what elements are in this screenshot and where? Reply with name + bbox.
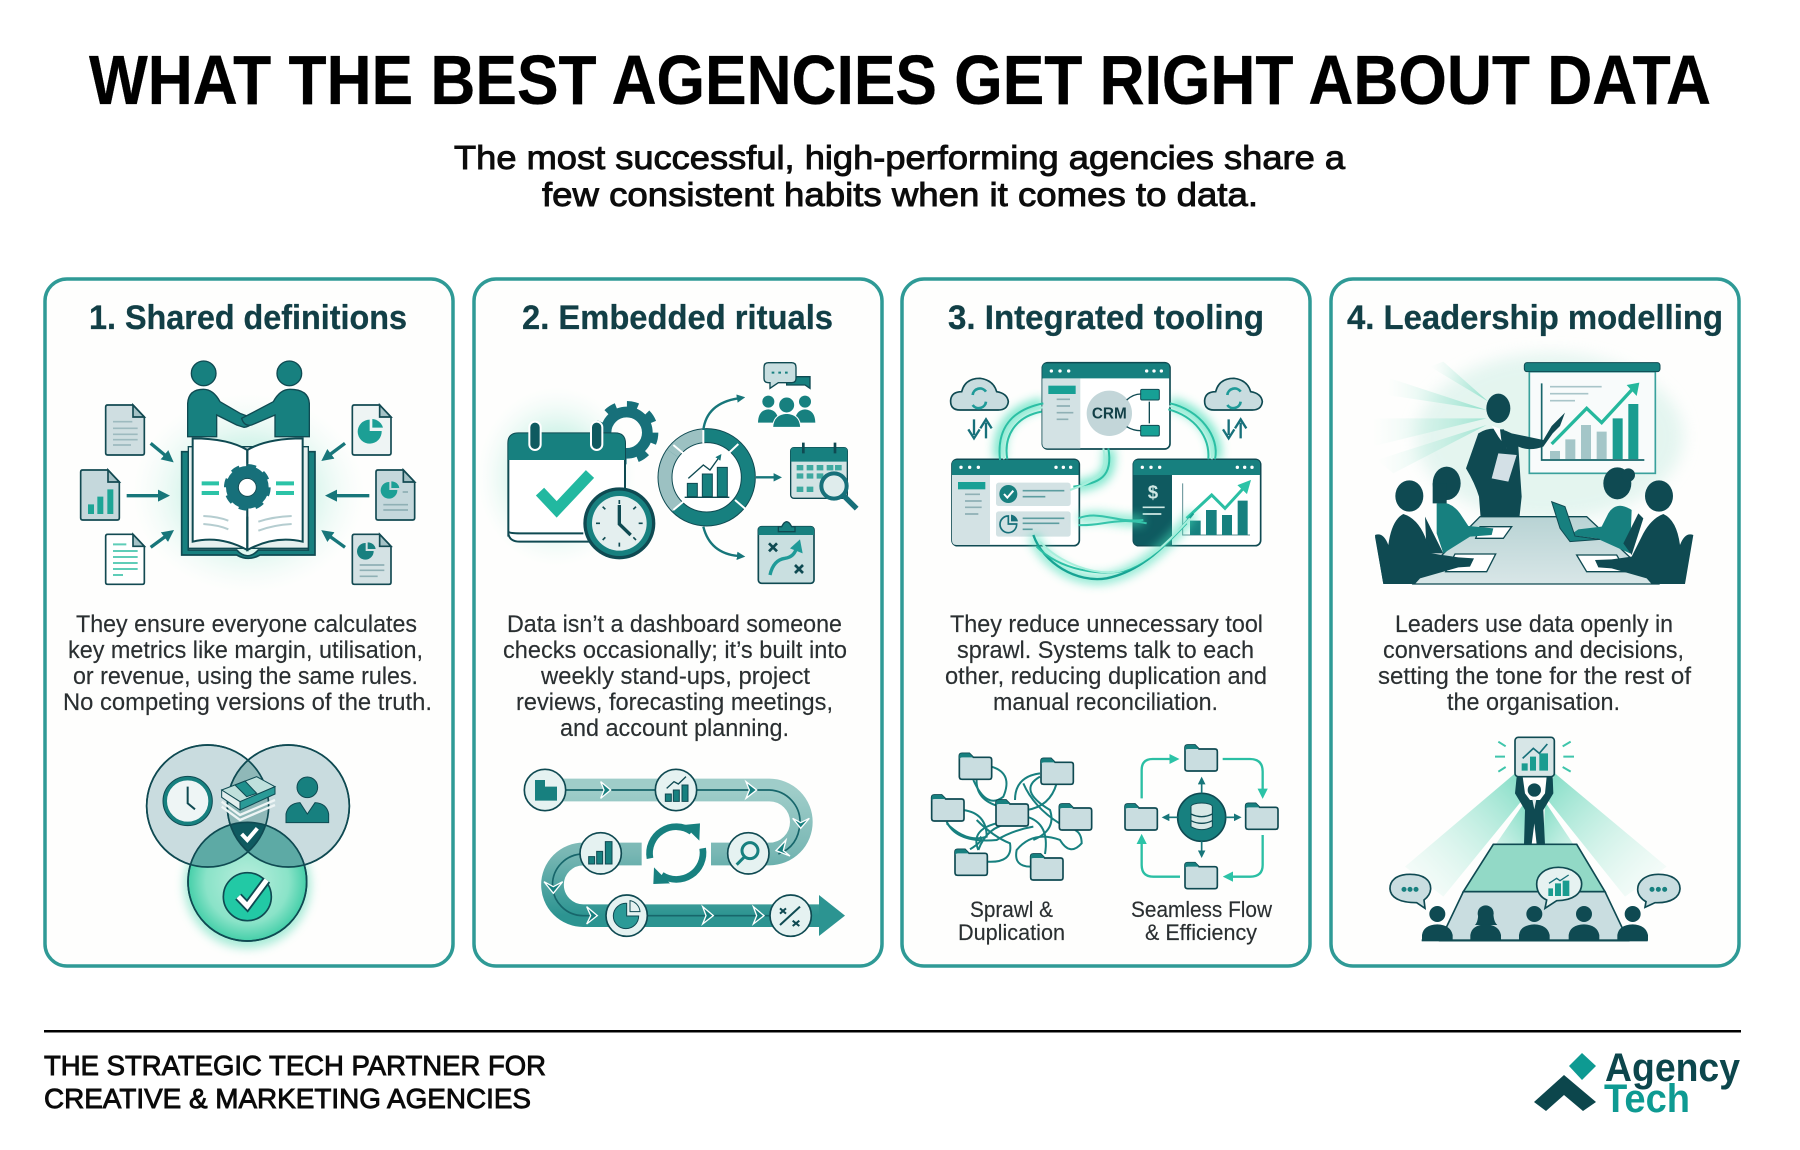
sub: money stack — [222, 777, 275, 820]
sub: sync arrows — [650, 827, 703, 879]
body text: embedded rituals: checks occasionally; it’s built into — [503, 637, 847, 664]
sub: clock — [583, 487, 655, 559]
label: seamless flow — [1131, 897, 1272, 945]
sub: raised data board — [1495, 737, 1574, 777]
body text: embedded rituals: reviews, forecasting meetings, — [516, 689, 833, 716]
body text: integrated tooling: manual reconciliation. — [993, 689, 1218, 716]
venn diagram — [147, 745, 349, 948]
illustration: connected app windows — [951, 363, 1262, 579]
body text: shared definitions: They ensure everyone calculates — [76, 611, 417, 638]
sub: outgoing arrows — [703, 398, 775, 556]
sub: chevrons — [544, 782, 809, 924]
body text: leadership modelling — [1378, 611, 1691, 716]
sub: database hub — [1168, 783, 1235, 851]
body text: leadership modelling: conversations and decisions, — [1383, 637, 1684, 664]
sub: CRM window: CRM — [1092, 406, 1127, 423]
panel: leadership modelling — [1331, 279, 1739, 966]
illustration: calendar, clock and hub — [477, 363, 857, 583]
body text: shared definitions: No competing versions of the truth. — [63, 689, 432, 716]
body text: leadership modelling: the organisation. — [1447, 689, 1620, 716]
panel: integrated tooling — [902, 279, 1310, 966]
sub: projection screen — [1524, 363, 1660, 473]
subtitle: The most successful, high-performing agencies share a — [454, 139, 1346, 176]
body text: integrated tooling: They reduce unnecessary tool — [950, 611, 1263, 638]
body text: shared definitions: or revenue, using the same rules. — [73, 663, 418, 690]
sub: table — [1413, 517, 1658, 584]
heading: shared definitions: 1. Shared definitions — [89, 299, 407, 337]
sub: light beams — [1405, 773, 1667, 897]
logo: Agency Tech: Tech — [1604, 1077, 1690, 1121]
sub: light rays — [1372, 362, 1488, 473]
body text: embedded rituals: Data isn’t a dashboard someone — [507, 611, 842, 638]
sub: person — [286, 777, 329, 823]
label: sprawl: Sprawl & — [970, 897, 1053, 922]
sub: calendar with check — [508, 422, 625, 542]
sub: leader figure — [1515, 777, 1553, 844]
subtitle — [454, 139, 1346, 213]
footer tagline — [44, 1050, 546, 1114]
heading: leadership modelling: 4. Leadership modelling — [1347, 299, 1723, 337]
logo: Agency Tech: Agency — [1605, 1046, 1741, 1090]
sub: finance window — [1133, 459, 1261, 546]
subtitle: few consistent habits when it comes to data. — [542, 176, 1258, 213]
sub: strategy clipboard — [758, 522, 814, 583]
body text: integrated tooling: other, reducing duplication and — [945, 663, 1267, 690]
sub: tangled wires — [947, 767, 1082, 867]
body text: embedded rituals: weekly stand-ups, project — [540, 663, 810, 690]
heading: integrated tooling: 3. Integrated tooling — [948, 299, 1264, 337]
sub: nodes — [524, 769, 811, 936]
sub: glowing wires — [1033, 513, 1193, 579]
label: sprawl — [958, 897, 1065, 945]
body text: shared definitions: key metrics like margin, utilisation, — [68, 637, 423, 664]
body text: embedded rituals — [503, 611, 847, 742]
sub: presenter — [1466, 394, 1565, 518]
label: sprawl: Duplication — [958, 920, 1065, 945]
sub: CRM window — [1042, 363, 1170, 449]
process road diagram — [524, 769, 845, 936]
body text: leadership modelling: setting the tone for the rest of — [1378, 663, 1691, 690]
sub: cycle arrows — [1142, 759, 1263, 877]
sub: speech bubbles — [1390, 867, 1680, 908]
footer tagline: CREATIVE & MARKETING AGENCIES — [44, 1083, 531, 1114]
sub: arrows into book — [127, 443, 369, 547]
body text: shared definitions — [63, 611, 432, 716]
sub: gear — [599, 405, 655, 461]
sub: wires glow under — [1000, 403, 1216, 487]
sub: calendar with magnifier — [791, 443, 857, 509]
sub: cloud left — [951, 378, 1008, 438]
sub: document icons — [81, 405, 415, 584]
logo: Agency Tech — [1534, 1046, 1741, 1121]
sub: clock — [163, 776, 212, 826]
sub: cloud right — [1205, 378, 1262, 438]
sub: check badge — [223, 873, 271, 921]
body text: embedded rituals: and account planning. — [560, 715, 789, 742]
body text: integrated tooling: sprawl. Systems talk to each — [957, 637, 1254, 664]
sub: folders — [932, 745, 1278, 889]
sub: team with chat bubbles — [758, 363, 815, 427]
label: seamless flow: & Efficiency — [1145, 920, 1257, 945]
diagram: sprawl vs seamless flow — [932, 745, 1278, 889]
footer tagline: THE STRATEGIC TECH PARTNER FOR — [44, 1050, 546, 1081]
sub: finance window: $ — [1148, 481, 1159, 502]
panel: embedded rituals — [474, 279, 882, 966]
illustration: presenter at meeting — [1372, 353, 1693, 584]
body text: leadership modelling: Leaders use data openly in — [1395, 611, 1673, 638]
body text: integrated tooling — [945, 611, 1267, 716]
sub: platform — [1440, 844, 1628, 941]
illustration: handshake, book and documents — [81, 361, 415, 593]
sub: tasks window — [952, 459, 1079, 546]
illustration: leader on platform with audience — [1390, 737, 1680, 941]
sub: right attendees — [1552, 467, 1693, 584]
sub: audience — [1422, 905, 1648, 941]
label: seamless flow: Seamless Flow — [1131, 897, 1272, 922]
panel: shared definitions — [45, 279, 453, 966]
sub: left attendees — [1375, 467, 1493, 584]
heading: embedded rituals: 2. Embedded rituals — [522, 299, 833, 337]
sub: data hub ring — [658, 429, 755, 526]
